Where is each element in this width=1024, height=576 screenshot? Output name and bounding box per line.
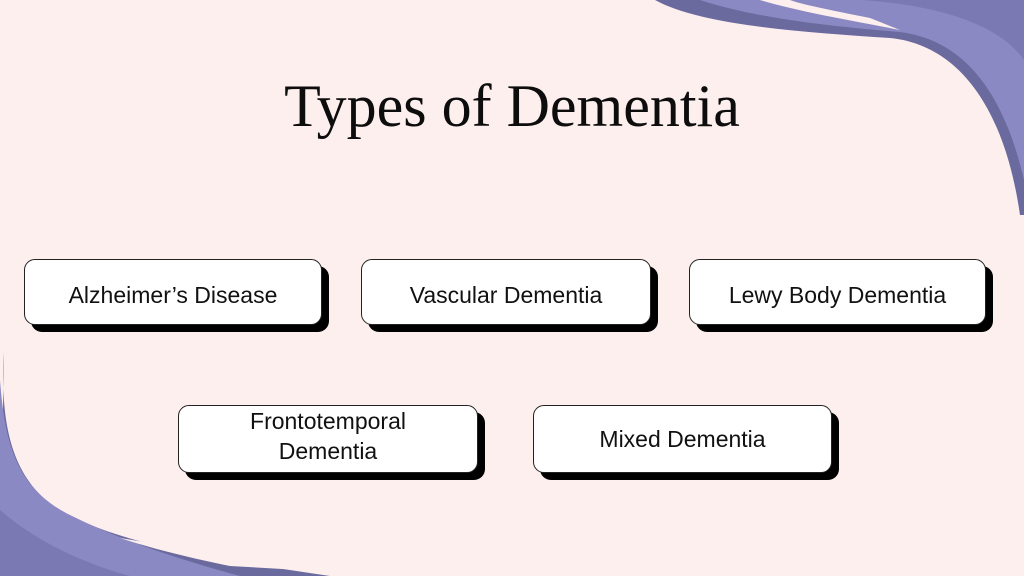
box: Lewy Body Dementia [689, 259, 986, 325]
wave: bottom left [0, 352, 330, 576]
box: Alzheimer's Disease: Alzheimer’s Disease [69, 282, 277, 308]
box: Frontotemporal Dementia: Frontotemporal [250, 408, 406, 434]
box: Mixed Dementia: Mixed Dementia [599, 426, 766, 452]
box: Frontotemporal Dementia: Dementia [279, 438, 377, 464]
box: Vascular Dementia [361, 259, 651, 325]
box: Alzheimer's Disease [24, 259, 322, 325]
title: Types of Dementia [284, 73, 740, 139]
wave: top right [655, 0, 1024, 215]
box: Frontotemporal Dementia [178, 405, 478, 473]
box: Vascular Dementia: Vascular Dementia [410, 282, 602, 308]
box: Lewy Body Dementia: Lewy Body Dementia [729, 282, 946, 308]
box: Mixed Dementia [533, 405, 832, 473]
